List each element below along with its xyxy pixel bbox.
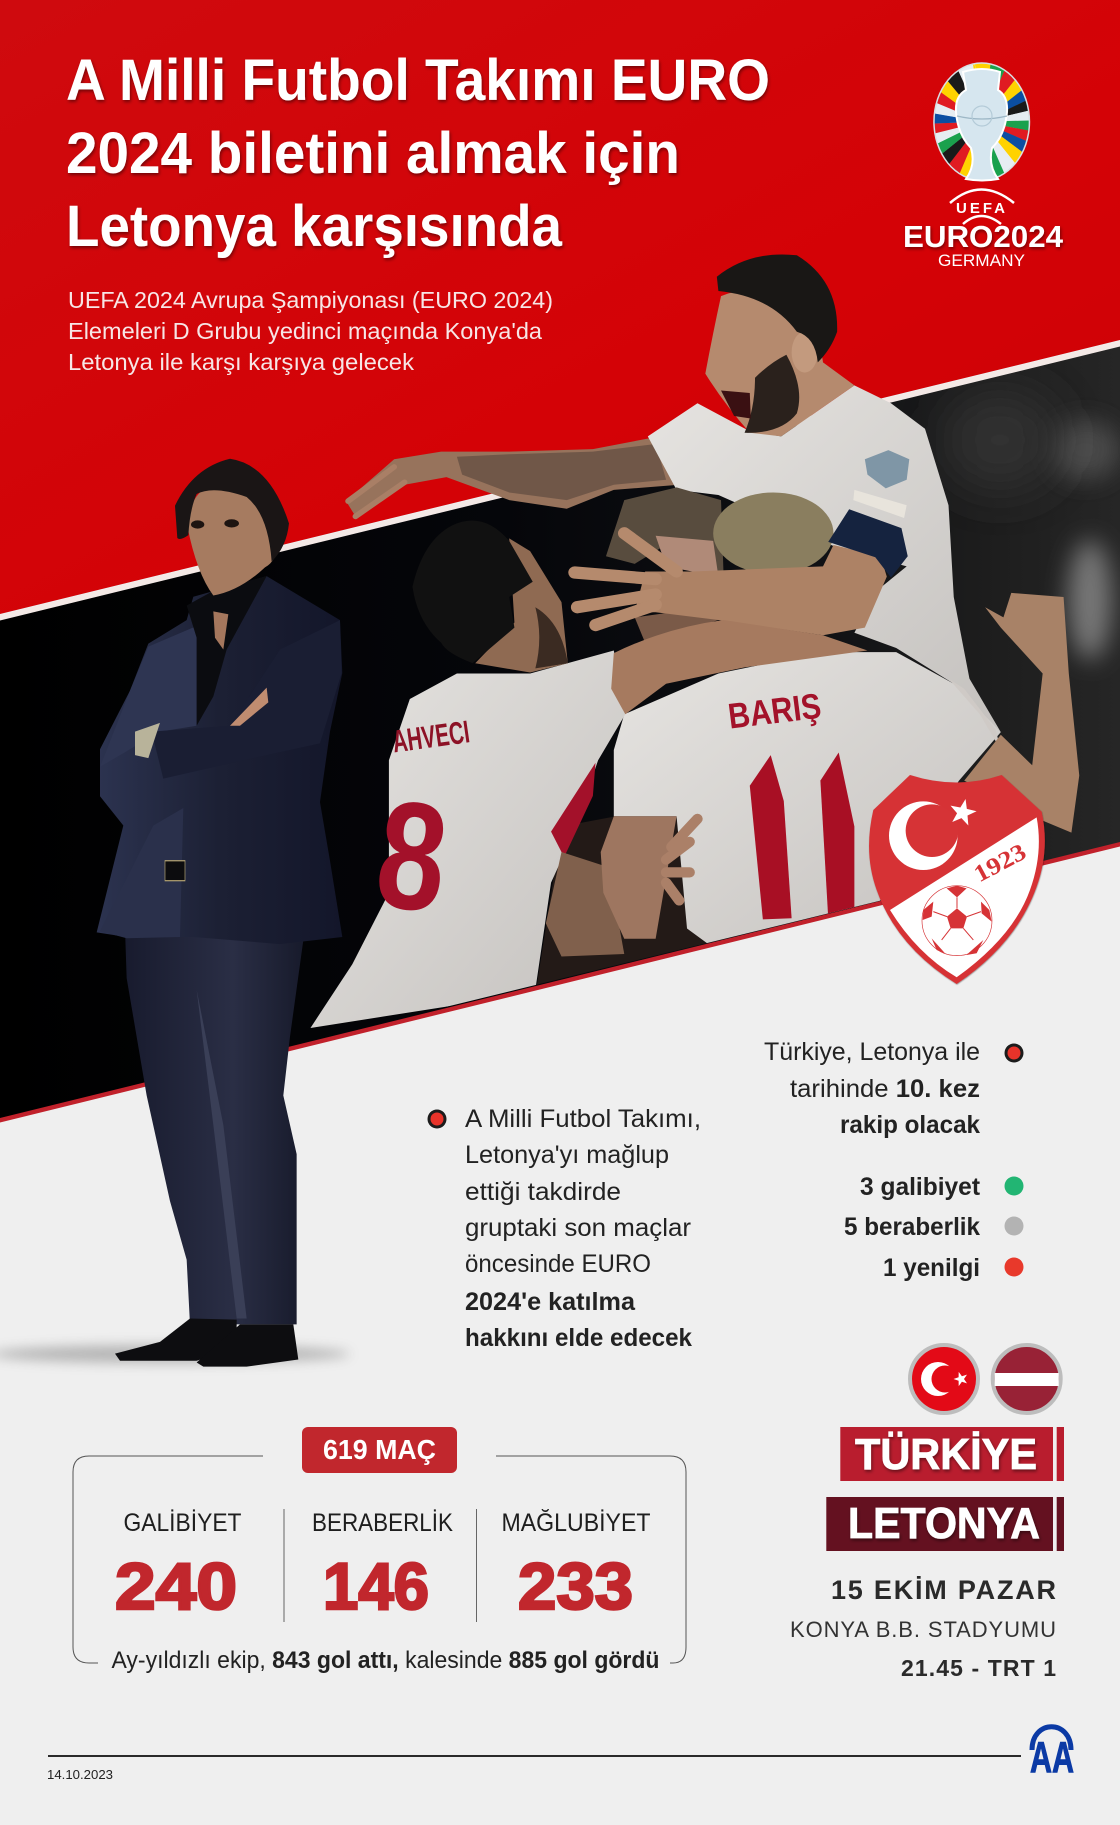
eyes	[191, 519, 239, 529]
footer	[47, 1727, 1074, 1782]
logo: EURO 2024	[903, 62, 1064, 270]
column labels	[124, 1508, 650, 1537]
dark photo band	[0, 343, 1120, 1120]
badge: 619 matches	[302, 1427, 457, 1473]
venue: KONYA B.B. STADYUMU	[790, 1617, 1056, 1642]
history text	[764, 1038, 980, 1139]
column labels: MAĞLUBİYET	[502, 1508, 650, 1537]
shirt and neck	[187, 576, 267, 726]
right arm and lower arms	[546, 593, 1079, 957]
EURO2024 wordmark: EURO2024	[903, 219, 1064, 254]
date: 14.10.2023	[47, 1767, 113, 1782]
subtitle	[68, 287, 553, 375]
column labels: BERABERLİK	[312, 1508, 453, 1537]
paragraph text: öncesinde EURO	[465, 1250, 651, 1278]
photo: coach	[97, 459, 342, 1367]
badge: 619 matches: 619 MAÇ	[323, 1434, 436, 1465]
history text: tarihinde 10. kez	[790, 1075, 980, 1103]
paragraph text: Letonya'yı mağlup	[465, 1141, 669, 1169]
left sleeve highlight	[100, 626, 197, 767]
football	[922, 886, 992, 956]
big numbers: 240	[115, 1549, 237, 1623]
shield: Turkish Football Federation	[869, 775, 1045, 984]
right text: history	[764, 1038, 1024, 1139]
time and channel: 21.45 - TRT 1	[901, 1655, 1056, 1681]
logo: Anadolu Agency	[1030, 1727, 1074, 1782]
title: 2024 biletini almak için	[66, 121, 680, 186]
crescent and star	[889, 796, 979, 870]
record list: 3 galibiyet	[860, 1173, 981, 1201]
subtitle: Elemeleri D Grubu yedinci maçında Konya'da	[68, 318, 542, 344]
jersey name: KAHVECİ: AHVECI	[390, 714, 472, 759]
goals note: Ay-yıldızlı ekip, 843 gol attı, kalesinde 885 gol gördü	[112, 1647, 660, 1674]
title: Letonya karşısında	[66, 194, 563, 259]
UEFA text	[950, 190, 1014, 224]
bullet	[1004, 1044, 1024, 1062]
icon: trophy emblem	[933, 62, 1030, 181]
history text: Türkiye, Letonya ile	[764, 1038, 980, 1066]
big numbers	[115, 1549, 633, 1623]
big numbers: 146	[323, 1549, 429, 1623]
crossed arm	[152, 620, 342, 779]
logo: Anadolu Agency: AA	[1030, 1733, 1074, 1782]
jersey name: BARIŞ: BARIŞ	[726, 685, 823, 736]
icon: Latvian flag	[993, 1345, 1061, 1413]
GERMANY: GERMANY	[938, 251, 1025, 270]
record list: 5 beraberlik	[844, 1213, 980, 1241]
icon: Turkish flag	[910, 1345, 978, 1413]
column labels: GALİBİYET	[124, 1508, 242, 1537]
paragraph text: gruptaki son maçlar	[465, 1214, 691, 1242]
top player body	[346, 254, 1001, 732]
hair	[175, 459, 289, 561]
record list	[844, 1173, 1024, 1282]
label: Letonya: LETONYA	[848, 1499, 1040, 1548]
label: Türkiye: TÜRKİYE	[855, 1430, 1037, 1479]
subtitle: Letonya ile karşı karşıya gelecek	[68, 349, 415, 375]
shoes	[115, 1318, 298, 1367]
shadow under coach	[0, 1345, 350, 1363]
far players hair	[606, 487, 833, 643]
title: A Milli Futbol Takımı EURO	[66, 48, 770, 113]
paragraph text: hakkını elde edecek	[465, 1324, 692, 1352]
big numbers: 233	[518, 1549, 633, 1623]
panel: fixture	[790, 1345, 1064, 1681]
captain arm	[575, 509, 908, 635]
centre player number 11	[614, 652, 1001, 951]
red header background	[0, 0, 1120, 614]
centre paragraph	[428, 1105, 701, 1352]
head	[187, 484, 281, 596]
panel: match statistics	[73, 1427, 686, 1674]
paragraph text	[465, 1105, 701, 1352]
box outline	[73, 1456, 686, 1663]
date: 15 EKİM PAZAR	[831, 1575, 1056, 1605]
photo: Turkish players celebrating	[310, 254, 1079, 1028]
trousers	[125, 928, 305, 1324]
dark mass behind players	[537, 816, 706, 984]
history text: rakip olacak	[840, 1111, 980, 1139]
white and red diagonal lines	[0, 341, 1120, 1122]
paragraph text: 2024'e katılma	[465, 1288, 636, 1316]
paragraph text: ettiği takdirde	[465, 1178, 621, 1206]
subtitle: UEFA 2024 Avrupa Şampiyonası (EURO 2024)	[68, 287, 553, 313]
record list: 1 yenilgi	[883, 1254, 980, 1282]
left player number 8	[310, 520, 867, 1028]
bullet	[428, 1110, 446, 1128]
title	[66, 48, 770, 259]
hand	[230, 688, 268, 726]
watch	[135, 723, 160, 758]
year 1923: 1923	[970, 839, 1031, 888]
belt	[165, 861, 185, 881]
UEFA text: UEFA	[956, 200, 1008, 217]
column dividers	[284, 1509, 476, 1622]
jacket	[97, 576, 342, 944]
paragraph text: A Milli Futbol Takımı,	[465, 1105, 701, 1133]
jersey number 8: 8	[369, 768, 455, 944]
